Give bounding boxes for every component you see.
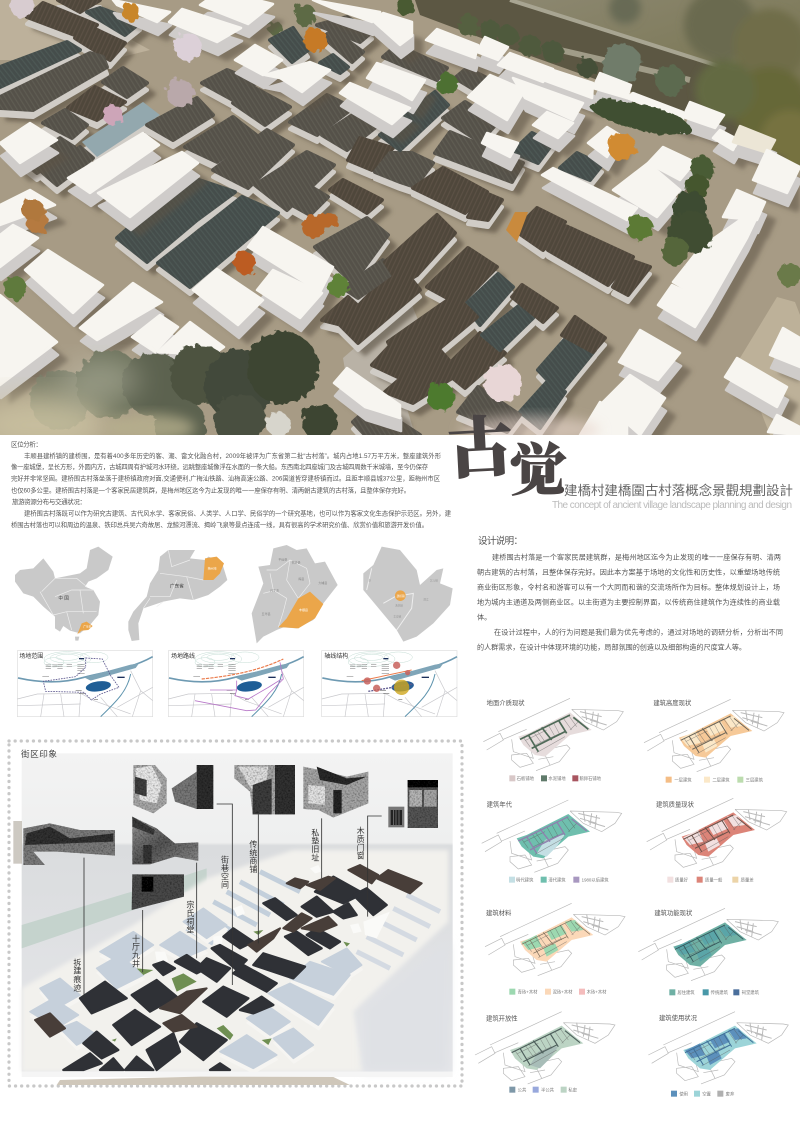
plan: axis structure: 轴线结构 [324,652,348,660]
diagram: building quality: 质量差 [741,876,754,883]
diagram: building age: 清代建筑 [548,876,566,883]
map: Fengshun county: 丰良镇 [393,614,402,618]
photo: clan ancestral hall [132,817,198,864]
aerial perspective render of the village [0,0,800,455]
diagram: building function [638,908,778,996]
plan: site extent [17,651,153,717]
map: Meizhou city: 蕉岭县 [292,559,301,564]
map: Fengshun county: 北斗镇 [430,579,438,583]
photo: wooden door [408,780,438,828]
diagram: building openness: 公共 [518,1086,527,1093]
diagram: building use status: 使用 [679,1090,688,1097]
map: Fengshun county [363,547,453,642]
diagram: ground material: 石板铺地 [517,775,535,782]
map: Guangdong province: 广东省 [170,583,184,590]
map: Guangdong province: 梅州市 [208,566,217,571]
dark roofed buildings [0,0,650,435]
plan: axis structure [322,651,457,717]
diagram: building use status: 建筑使用状况 [659,1013,698,1022]
diagram: building height: 三层建筑 [746,776,764,783]
design description text: 商业街区形象，令村名和游客可以有一个大同而和谐的交流场所作为目标。整体规划设计上，场 [477,582,780,592]
lower fade band [22,1072,453,1077]
location analysis text block: 建桥围古村落既可以作为研究古建筑、古代风水学、客家民俗、人类学、人口学、民俗学的一个研究基地，也可以作为客家文化生态保护示范区。另外，建 [24,508,452,518]
photo: street lane [133,765,213,813]
map: Meizhou city: 梅县 [298,576,304,581]
location analysis text block: 丰顺县建桥镇的建桥围，是有着400多年历史的客、潮、畲文化融合村，2009年被评为广东省第二批“古村落”。城内占地1.57万平方米，整座建筑外形 [24,451,442,460]
diagram: building material: 建筑材料 [486,908,512,917]
photo: ten halls nine wells [132,874,184,910]
location analysis text block: 完好并非常坚固。建桥围古村落坐落于建桥镇政府对面,交通便利,广梅汕铁路、汕梅高速公路、206国道皆穿建桥镇而过。且距丰顺县城37公里，距梅州市区 [11,474,440,482]
design description text: 地为城内主通道及两侧商业区。以主街道为主要控制界面，以传统商住建筑作为连续性的商业载 [477,598,780,606]
english subtitle: The concept of ancient village landscape planning and design [552,500,792,511]
map: Fengshun county: 潭江 [423,598,429,602]
tan roof strip at bottom [57,1077,350,1085]
photo: wooden window [388,807,404,827]
plan: site routes [168,651,304,717]
diagram: building age: 建筑年代 [487,800,513,809]
vertical label: wooden doors and windows: 木质门窗 [356,826,365,861]
vertical label: demolition traces: 拆建痕迹 [73,957,82,992]
site analysis plans row [17,651,457,717]
diagram: building age: 明代建筑 [516,876,534,883]
location analysis text block: 旅游资源分布与交通状况： [12,497,86,506]
map: Fengshun county: 汤坑镇 [395,604,403,608]
woods with mist along the lower edge [0,332,338,455]
vertical label: traditional shops: 传统商铺 [249,839,258,874]
lower path along river [560,50,690,80]
map: Meizhou city: 丰顺县 [299,607,308,612]
current-condition analysis diagrams [475,698,788,1097]
foreground trees [3,0,800,411]
location maps row [15,545,453,643]
misty woods at top right [609,0,800,170]
location analysis text block [11,440,452,529]
map: Meizhou city [252,545,338,643]
diagram: building use status [648,1012,788,1097]
diagram: building function: 传统建筑 [711,989,729,996]
green courtyards [112,930,350,1045]
map: Fengshun county: 茶 [368,579,371,583]
calligraphic title [444,393,567,507]
dotted panel frame [9,741,462,1086]
paved light street lower left [343,300,420,435]
map: Meizhou city: 平远县 [278,557,287,562]
photo: traditional shop [234,765,295,814]
plan: site extent: 场地范围 [19,652,43,660]
title glyph: 古: 古 [444,393,515,492]
map: Meizhou city: 五华县 [262,611,271,616]
diagram: building material: 泥砖+木材 [553,988,573,995]
dark tiled roofs [63,877,387,1070]
diagram: building function: 祠堂建筑 [742,989,760,996]
diagram: building quality: 质量一般 [705,876,723,883]
design description text: 的人群需求，在设计中体现环境的功能，局部氛围的创造以及细部构造的尺度宜人等。 [477,642,746,652]
diagram: building quality [647,798,787,883]
design description text: 体。 [477,612,491,622]
vertical label: clan hall: 宗氏祠堂 [186,900,195,934]
pale blue long roof strips [187,868,440,968]
design description text: 朝古建筑的古村落，且整体保存完好。因此本方案基于场地的文化性和历史性，以重塑场地传统 [477,568,780,576]
plan: site routes: 场地路线 [171,652,195,660]
diagram: building height [644,698,784,783]
location analysis text block: 像一座城堡，呈长方形，外圆内方，古城四周有护城河水环绕，远眺整座城像浮在水面的一条大船。东西南北四座城门及古城四周数千米城墙，至今仍保存 [11,462,429,471]
title glyph: 觉: 觉 [510,427,567,507]
diagram: ground material [483,698,623,782]
diagram: building openness: 私密 [568,1086,578,1093]
diagram: building material [485,903,625,995]
diagram: building openness [475,1012,615,1093]
heading: street impressions: 街区印象 [21,748,57,759]
paved light area at lower right [740,297,800,435]
photographs and callouts [23,765,438,998]
diagram: building material: 青砖+木材 [518,988,538,995]
diagram: ground material: 地面介质现状 [487,698,525,707]
diagram: building age [482,800,622,883]
diagram: building quality: 质量好 [675,876,689,883]
map: Guangdong province [128,550,227,641]
3D massing scene [13,753,453,1085]
diagonal embankment road [510,0,782,86]
callout lines [84,804,382,998]
white page background for lower section [0,435,800,1131]
design description text: 在设计过程中，人的行为问题是我们最为优先考虑的，通过对场地的调研分析，分析出不同 [494,628,783,636]
diagram: building height: 建筑高度现状 [653,698,692,707]
diagram: building height: 一层建筑 [674,776,692,783]
blue-grey white roofs [30,908,362,1068]
diagram: building openness: 半公共 [541,1086,555,1093]
white rendered buildings [0,0,800,435]
vertical label: ten halls nine wells: 十厅九井 [131,933,140,968]
diagram: building function: 建筑功能现状 [654,908,693,917]
photo: old private school [303,767,368,818]
trees behind buildings [268,0,685,95]
photo: demolished site [23,823,115,865]
design description text: 建桥围古村落是一个客家民居建筑群，是梅州地区迄今为止发现的唯一一座保存有明、清两 [492,552,781,562]
vertical label: old school: 私塾旧址 [311,828,320,862]
foggy fields and woods at top right [512,0,800,95]
map: China: 广东省 [83,624,92,628]
orange timber facade [506,212,528,242]
map: Meizhou city: 兴宁市 [270,588,279,593]
river bank band [415,0,800,165]
diagram: ground material: 水泥铺地 [548,775,566,782]
diagram: ground material: 鹅卵石铺地 [579,775,602,782]
design description heading: 设计说明： [478,535,523,547]
top-left paved ground [0,0,150,60]
location analysis text block: 也仅60多公里。建桥围古村落是一个客家民居建筑群，是梅州地区迄今为止发现的唯一一座保存有明、清两朝古建筑的古村落，且整体保存完好。 [11,486,410,494]
diagram: building material: 木砖+木材 [587,988,607,995]
diagram: building use status: 废弃 [726,1090,735,1097]
diagram: building quality: 建筑质量现状 [656,800,695,809]
warm glow behind the title [460,416,600,444]
vertical label: lane space: 街巷空间 [220,855,229,890]
project subtitle: 建橋村建橋圍古村落概念景觀規劃設計 [564,483,793,498]
map: China [15,547,113,641]
location analysis text block: 区位分析： [11,440,42,448]
white roof accents [155,865,390,962]
brown tiled roofs [35,865,422,1037]
diagram: building height: 二层建筑 [712,776,730,783]
map: China: 中 国 [58,594,69,601]
panel: street impressions [9,741,462,1086]
location analysis text block: 桥围古村落也可以和周边的温泉、铁印总兵吴六奇故居、龙鲸河漂流、揭岭飞泉等景点连成一线，具有很高的学术研究价值、欣赏价值和旅游开发价值。 [11,520,428,529]
design description text [477,552,783,652]
diagram: building use status: 空置 [702,1090,712,1097]
diagram: building openness: 建筑开放性 [486,1014,518,1023]
map: Meizhou city: 大埔县 [318,580,327,585]
diagram: building function: 居住建筑 [677,989,695,996]
diagram: building age: 1980以后建筑 [582,876,609,883]
map: Fengshun county: 建桥镇 [397,594,405,598]
